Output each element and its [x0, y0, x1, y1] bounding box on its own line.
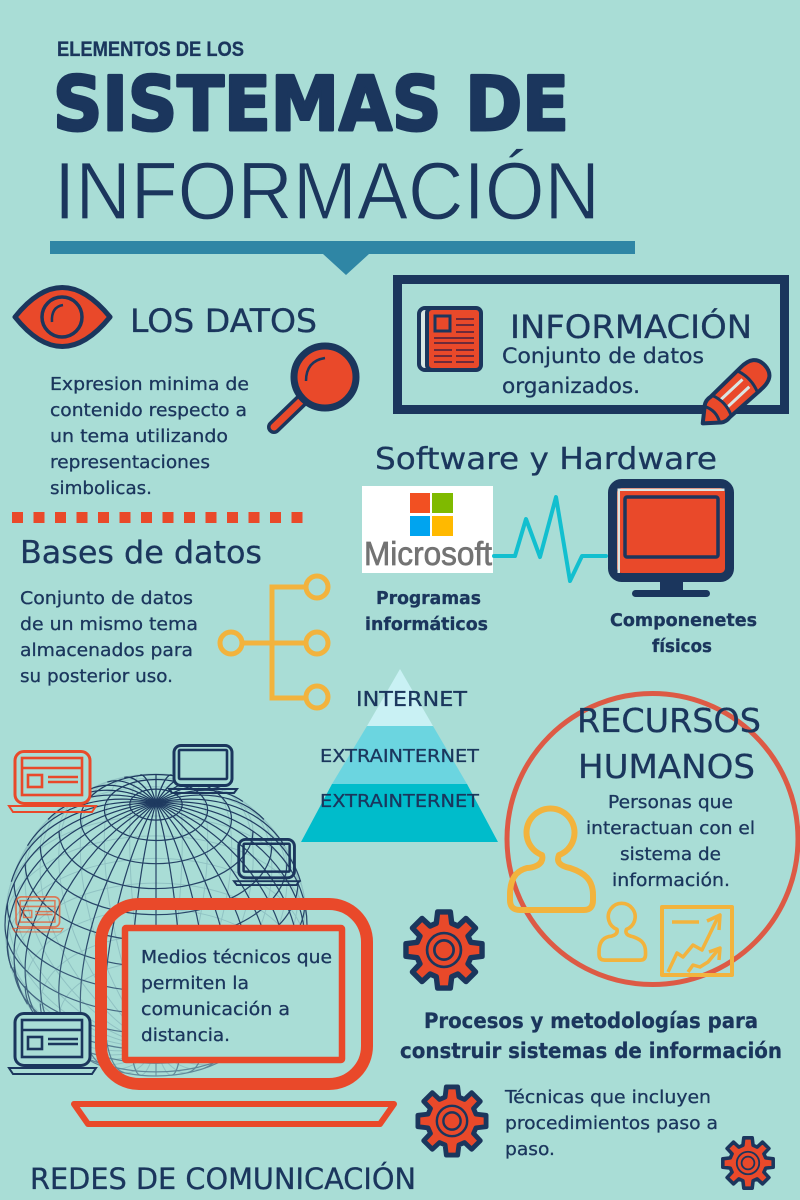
text: redes description: distancia.	[141, 1025, 230, 1046]
icon: microsoft logo: Microsoft	[364, 535, 492, 572]
icon: growth chart	[662, 907, 732, 975]
icon: navy laptop bottom left	[9, 1014, 96, 1074]
icon: monitor	[612, 484, 730, 597]
panel: informacion	[398, 280, 784, 434]
icon: gear small	[723, 1138, 773, 1188]
icon: microsoft logo	[362, 486, 493, 573]
text: recursos humanos description: interactuan con el	[586, 818, 755, 839]
text: informacion description: Conjunto de datos	[502, 344, 704, 368]
text: bases de datos description: su posterior uso.	[20, 666, 173, 687]
text: redes description: comunicación a	[141, 999, 290, 1020]
label: componentes fisicos: físicos	[652, 636, 712, 657]
icon: gear large	[406, 912, 482, 988]
icon: large orange laptop	[74, 904, 394, 1124]
icon: gear medium	[418, 1087, 486, 1155]
heading: informacion: INFORMACIÓN	[510, 307, 752, 346]
icon: pulse line	[494, 497, 606, 581]
icon: navy laptop top	[169, 746, 237, 793]
text: recursos humanos description: sistema de	[620, 844, 721, 865]
heading: software y hardware: Software y Hardware	[375, 442, 717, 477]
text: informacion description	[502, 344, 704, 398]
label: programas informaticos: informáticos	[365, 614, 488, 635]
icon: large person	[510, 809, 593, 910]
text: los datos description: contenido respecto a	[50, 400, 247, 421]
text: recursos humanos description	[586, 792, 755, 891]
heading: procesos y metodologias: Procesos y metodologías para	[424, 1009, 758, 1033]
panel: recursos humanos	[507, 694, 798, 984]
heading: redes de comunicacion: REDES DE COMUNICACIÓN	[30, 1162, 416, 1196]
pyramid label: top: INTERNET	[356, 687, 468, 711]
label: programas informaticos: Programas	[376, 588, 481, 609]
heading: recursos humanos: HUMANOS	[578, 747, 755, 786]
heading: bases de datos: Bases de datos	[20, 535, 262, 571]
icon: database tree	[220, 576, 328, 708]
title: second line: INFORMACIÓN	[54, 146, 600, 237]
text: los datos description: simbolicas.	[50, 478, 152, 499]
icon: navy laptop right	[234, 839, 299, 885]
title: main line: SISTEMAS DE	[53, 60, 569, 148]
label: componentes fisicos: Componenetes	[610, 610, 757, 631]
text: redes description	[141, 947, 332, 1046]
text: redes description: permiten la	[141, 973, 249, 994]
heading: los datos: LOS DATOS	[130, 302, 317, 340]
pyramid label: middle: EXTRAINTERNET	[320, 746, 480, 767]
pyramid label: bottom: EXTRAINTERNET	[320, 791, 480, 812]
icon: magnifying glass	[274, 346, 356, 427]
text: bases de datos description: Conjunto de datos	[20, 588, 193, 609]
chart: wire globe	[4, 774, 308, 1077]
text: procesos description: Técnicas que incluyen	[504, 1087, 711, 1108]
dotted divider	[12, 512, 302, 523]
heading: recursos humanos	[577, 701, 761, 786]
label: componentes fisicos	[610, 610, 757, 657]
label: programas informaticos	[365, 588, 488, 635]
text: procesos description: paso.	[505, 1139, 555, 1160]
heading: procesos y metodologias: construir sistemas de información	[400, 1039, 782, 1063]
title divider bar with pointer	[50, 241, 635, 275]
text: los datos description	[50, 374, 249, 499]
heading: procesos y metodologias	[400, 1009, 782, 1063]
icon: orange laptop top left	[9, 752, 96, 812]
text: los datos description: un tema utilizando	[50, 426, 228, 447]
text: procesos description: procedimientos paso a	[505, 1113, 718, 1134]
text: los datos description: Expresion minima de	[50, 374, 249, 395]
text: informacion description: organizados.	[502, 374, 640, 398]
icon: eye	[15, 288, 110, 346]
title: kicker: ELEMENTOS DE LOS	[57, 38, 244, 61]
text: redes description: Medios técnicos que	[141, 947, 332, 968]
icon: small person	[599, 903, 646, 960]
title	[53, 38, 600, 237]
icon: newspaper	[419, 308, 481, 370]
front lines	[4, 774, 308, 1077]
text: los datos description: representaciones	[50, 452, 210, 473]
text: bases de datos description	[20, 588, 198, 687]
text: recursos humanos description: información.	[612, 870, 730, 891]
chart: pyramid	[301, 669, 498, 842]
text: bases de datos description: almacenados para	[20, 640, 193, 661]
icon: pencil	[692, 354, 775, 434]
text: recursos humanos description: Personas que	[608, 792, 733, 813]
text: procesos description	[504, 1087, 718, 1160]
back lines	[0, 744, 345, 1106]
text: bases de datos description: de un mismo tema	[20, 614, 198, 635]
heading: recursos humanos: RECURSOS	[577, 701, 761, 740]
icon: faded orange laptop	[13, 897, 63, 932]
